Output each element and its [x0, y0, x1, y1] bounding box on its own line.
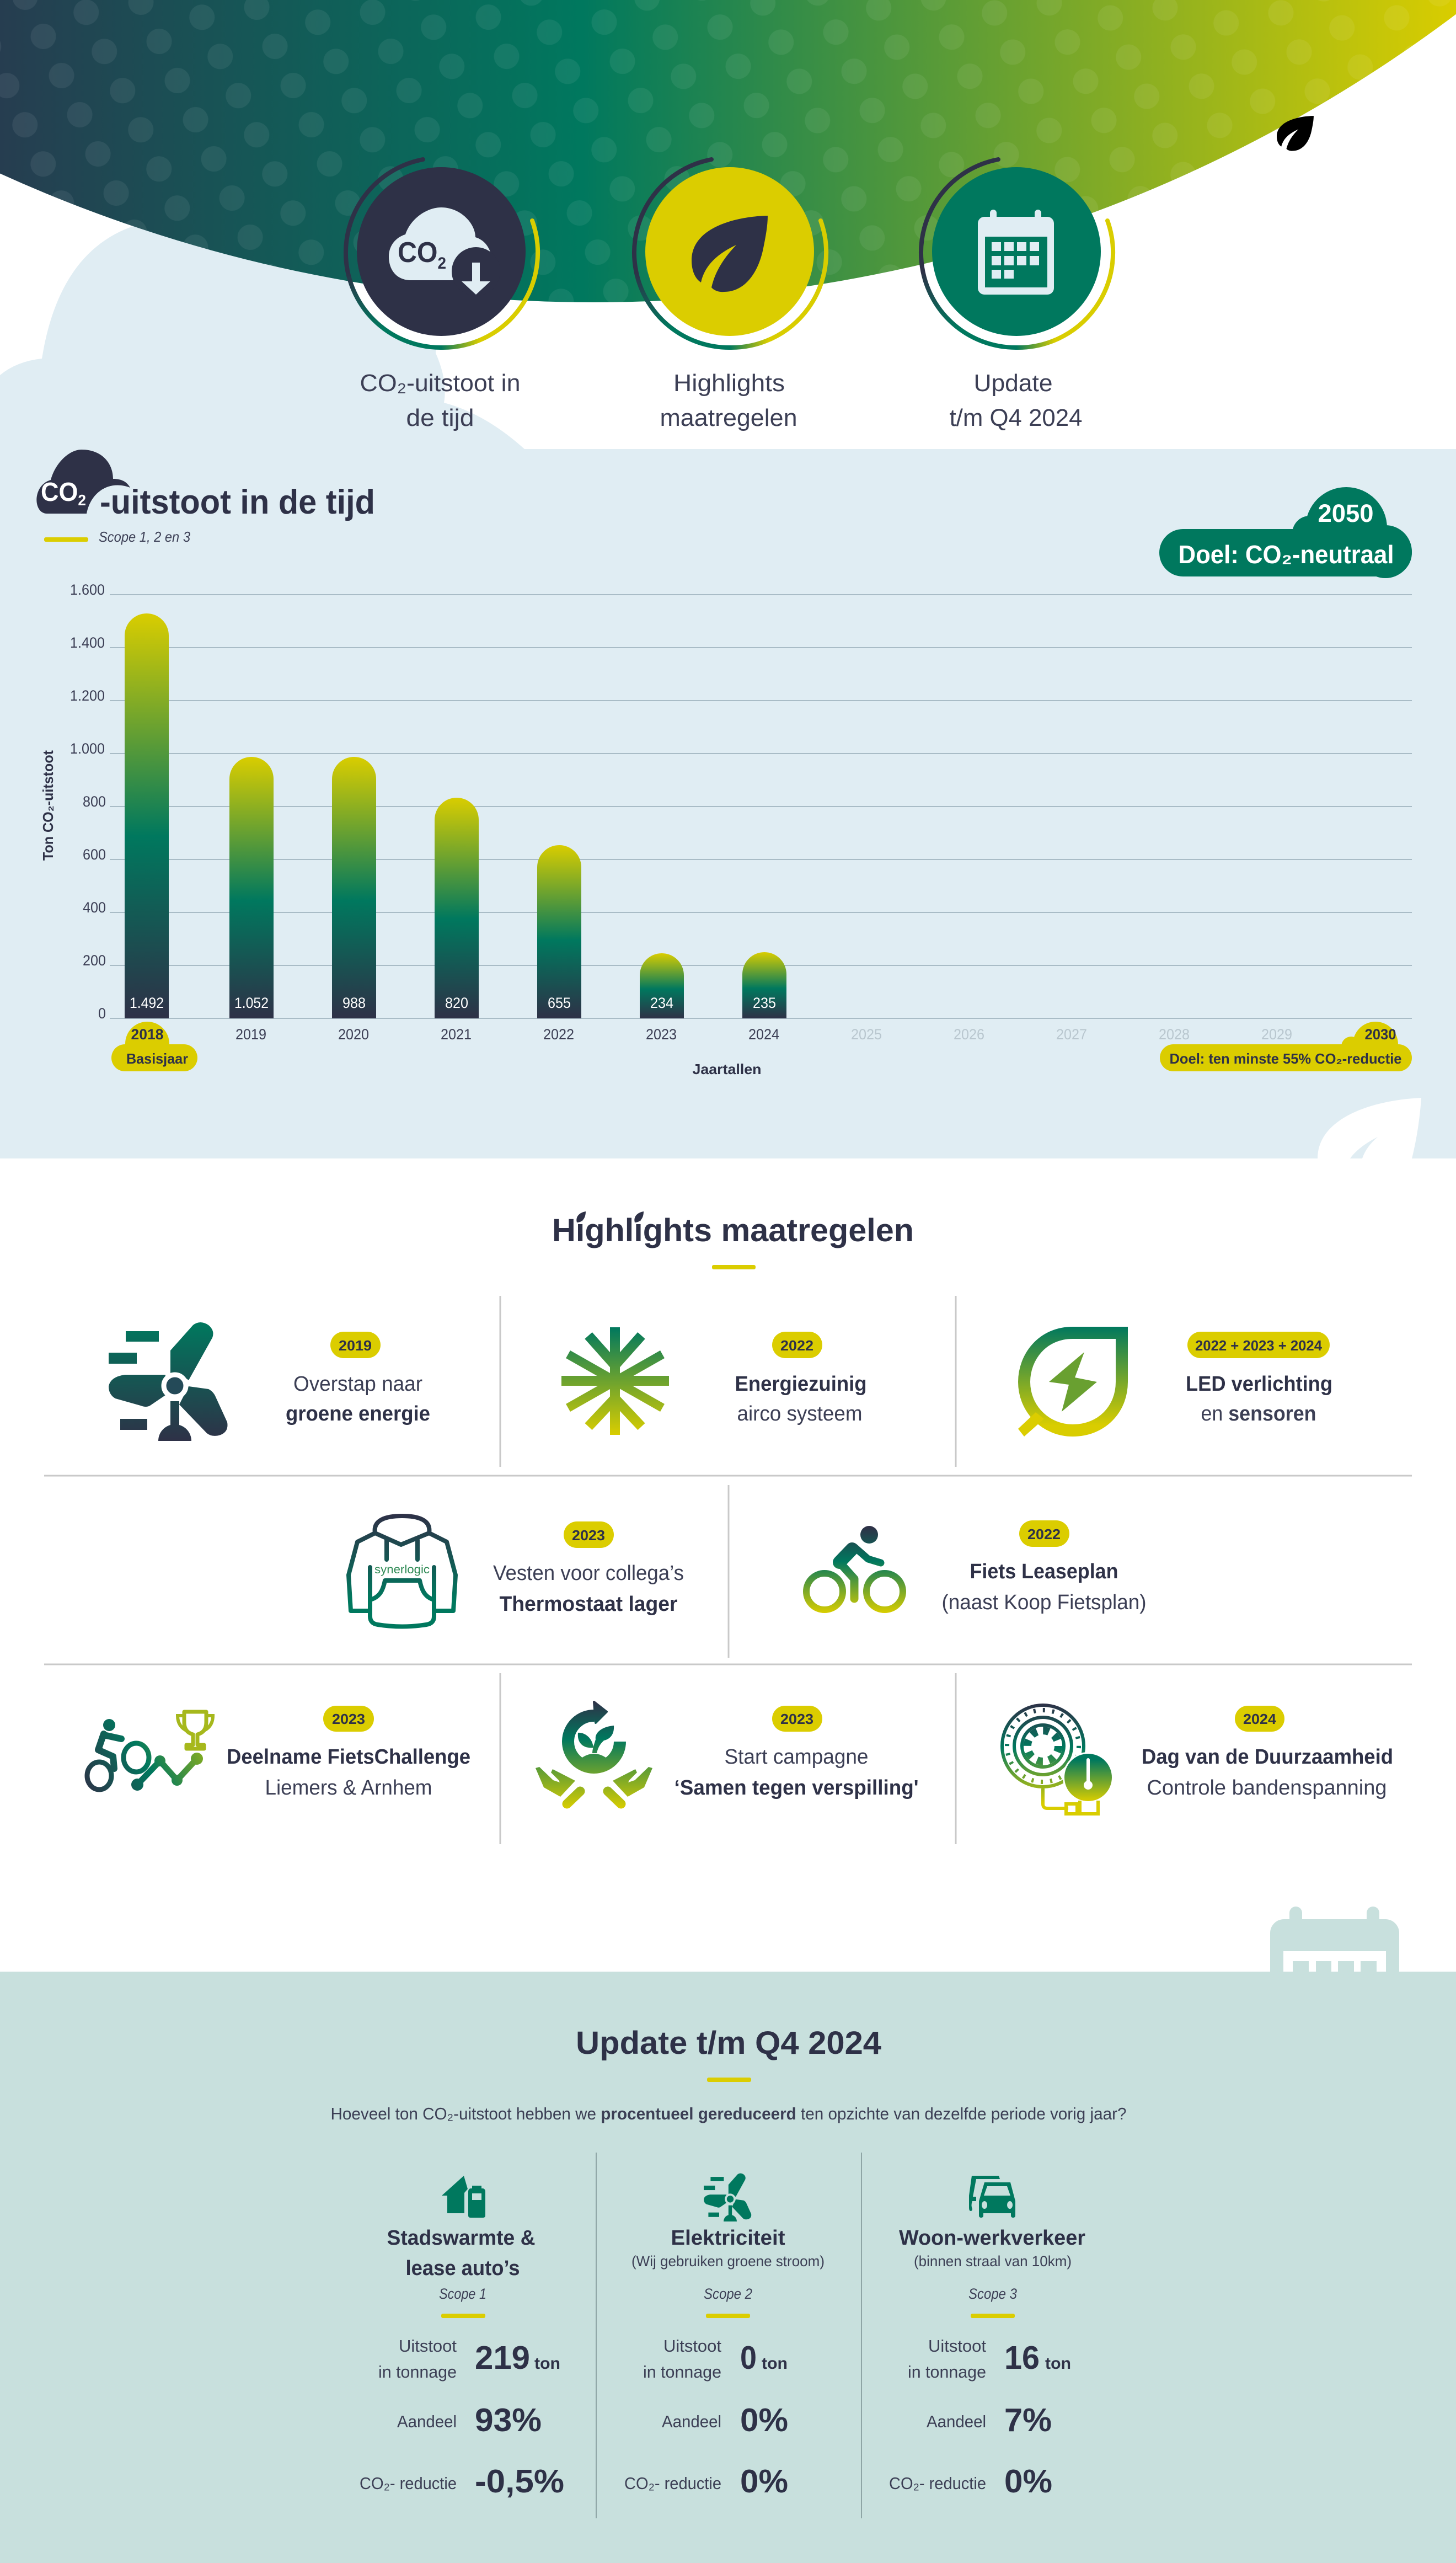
item: energiezuinig: [561, 1327, 867, 1435]
y axis labels: 400: [83, 899, 106, 916]
panel: update background: [0, 1972, 1456, 2563]
heading: Update t/m Q4 2024: Update t/m Q4 2024: [576, 2025, 881, 2061]
navigation labels: Highlights: [673, 370, 785, 397]
column: scope 3: ton: [1045, 2354, 1071, 2373]
icon: CO2 cloud in title: CO: [41, 478, 81, 507]
icon: CO2 cloud in title: 2: [78, 492, 86, 509]
column: scope 3: [889, 2176, 1085, 2500]
y axis labels: 1.200: [70, 687, 105, 704]
icon: cars: [969, 2176, 1015, 2218]
icon: leaf circle: [634, 159, 826, 348]
icon: wind turbine: [109, 1322, 227, 1441]
item: dag van de duurzaamheid: 2024: [1243, 1711, 1277, 1727]
column: scope 2: Uitstoot: [663, 2336, 721, 2356]
item: fietschallenge: Deelname FietsChallenge: [227, 1745, 470, 1769]
goal badge 2030: Doel: ten minste 55% CO₂-reductie: [1169, 1050, 1402, 1067]
heading: Highlights maatregelen: Highlights maatregelen: [552, 1213, 914, 1248]
y axis labels: 200: [83, 952, 106, 969]
column: scope 2: 0: [740, 2340, 757, 2376]
item: samen tegen verspilling: ‘Samen tegen verspilling': [674, 1776, 919, 1800]
bar values: 1.492: [130, 995, 164, 1011]
x axis labels: 2029: [1261, 1026, 1292, 1043]
column: scope 2: Elektriciteit: [671, 2226, 785, 2250]
column: scope 1: in tonnage: [378, 2362, 457, 2382]
item: dag van de duurzaamheid: Controle bandenspanning: [1147, 1776, 1387, 1800]
y axis labels: 1.000: [70, 740, 105, 757]
icon: snowflake: [561, 1327, 669, 1435]
column: scope 1: Aandeel: [397, 2412, 457, 2431]
icon: sprout in hands: [536, 1702, 652, 1804]
icon: black leaf: [1277, 116, 1314, 151]
item: thermostaat lager: 2023: [572, 1527, 605, 1544]
icon: white leaf decoration: [1318, 1098, 1421, 1158]
x axis labels: 2028: [1159, 1026, 1190, 1043]
y axis labels: 1.600: [70, 581, 105, 598]
white disc behind first icon: [346, 157, 536, 346]
scope legend: Scope 1, 2 en 3: [99, 528, 190, 545]
item: energiezuinig: Energiezuinig: [735, 1373, 867, 1396]
item: groene energie: Overstap naar: [293, 1373, 422, 1396]
column: scope 1: CO₂- reductie: [360, 2474, 457, 2493]
x axis labels: 2019: [235, 1026, 266, 1043]
column: scope 2: 0%: [740, 2463, 788, 2500]
item: thermostaat lager: synerlogic: [374, 1563, 430, 1576]
item: fietschallenge: Liemers & Arnhem: [265, 1776, 432, 1800]
column: scope 2: Scope 2: [704, 2286, 752, 2302]
icon: calendar circle: [921, 159, 1113, 348]
column: scope 3: Aandeel: [927, 2412, 986, 2431]
column: scope 3: Scope 3: [968, 2286, 1017, 2302]
column: scope 1: -0,5%: [475, 2463, 564, 2500]
item: fietschallenge: [87, 1706, 470, 1800]
bar values: 655: [548, 995, 571, 1011]
y axis labels: [70, 581, 106, 1022]
navigation labels: Update: [974, 370, 1052, 397]
column: scope 3: 0%: [1004, 2463, 1052, 2500]
y axis labels: 600: [83, 846, 106, 863]
goal badge 2030: [1160, 1022, 1412, 1071]
column: scope 3: (binnen straal van 10km): [914, 2253, 1072, 2270]
bar values: 234: [650, 995, 673, 1011]
x axis labels: 2026: [954, 1026, 984, 1043]
item: LED verlichting: 2022 + 2023 + 2024: [1195, 1337, 1323, 1354]
scope legend: [44, 528, 190, 545]
icon: CO2 circle: [346, 159, 538, 348]
item: energiezuinig: airco systeem: [737, 1402, 863, 1425]
navigation labels: CO₂-uitstoot in: [360, 370, 521, 397]
badge: [772, 1706, 822, 1732]
header gradient blob: [0, 0, 1456, 302]
icon: LED leaf: [1018, 1333, 1122, 1437]
badge: [1235, 1706, 1284, 1732]
item: fietschallenge: 2023: [332, 1711, 365, 1727]
icon: hoodie: [349, 1516, 456, 1626]
heading: Update t/m Q4 2024: [576, 2025, 881, 2082]
icon: CO2 circle: CO: [398, 237, 441, 269]
navigation labels: maatregelen: [660, 404, 797, 431]
basisjaar badge: Basisjaar: [126, 1050, 188, 1067]
bar values: 988: [342, 995, 366, 1011]
badge: [772, 1332, 822, 1358]
column: scope 1: 219: [475, 2340, 530, 2376]
icon: house and gas bottle: [442, 2176, 485, 2218]
basisjaar badge: [111, 1022, 197, 1071]
item: thermostaat lager: [349, 1516, 684, 1626]
heading: CO2-uitstoot in de tijd: -uitstoot in de tijd: [100, 483, 375, 521]
basisjaar badge: 2018: [131, 1026, 163, 1043]
item: groene energie: groene energie: [286, 1402, 430, 1425]
item: samen tegen verspilling: Start campagne: [725, 1745, 868, 1769]
x axis labels: 2022: [543, 1026, 574, 1043]
goal badge 2030: 2030: [1364, 1026, 1396, 1043]
bar values: 1.052: [234, 995, 269, 1011]
item: fiets leaseplan: Fiets Leaseplan: [970, 1560, 1118, 1583]
item: dag van de duurzaamheid: Dag van de Duurzaamheid: [1142, 1745, 1393, 1769]
icon: tyre pressure gauge: [1002, 1705, 1114, 1814]
bar chart: [40, 581, 1412, 1077]
y axis labels: 800: [83, 793, 106, 810]
goal badge 2050: Doel: CO₂-neutraal: [1178, 540, 1394, 569]
item: dag van de duurzaamheid: [1002, 1705, 1393, 1814]
badge: [1019, 1520, 1069, 1547]
item: groene energie: [109, 1322, 430, 1441]
column: scope 3: in tonnage: [908, 2362, 986, 2382]
column: scope 2: in tonnage: [643, 2362, 721, 2382]
navigation labels: t/m Q4 2024: [950, 404, 1082, 431]
x axis title: Jaartallen: [693, 1061, 761, 1077]
item: thermostaat lager: Vesten voor collega’s: [493, 1562, 684, 1585]
icon: CO2 cloud in title: [36, 450, 130, 514]
heading: Highlights maatregelen: [552, 1211, 914, 1269]
icon: calendar decoration: [1270, 1907, 1399, 1972]
navigation labels: [360, 370, 1082, 431]
x axis labels: 2024: [748, 1026, 779, 1043]
column: scope 3: Uitstoot: [928, 2336, 986, 2356]
y axis labels: 1.400: [70, 634, 105, 651]
icon: wind turbine small: [704, 2174, 751, 2222]
column: scope 3: 16: [1004, 2340, 1040, 2376]
y axis title: Ton CO₂-uitstoot: [40, 750, 56, 861]
column: scope 1: [360, 2176, 564, 2500]
x axis labels: [235, 1026, 1292, 1043]
x axis labels: 2025: [851, 1026, 882, 1043]
panel: CO2 chart background with cloud: [0, 221, 1456, 1158]
column: scope 1: 93%: [475, 2402, 542, 2438]
item: LED verlichting: LED verlichting: [1186, 1373, 1332, 1396]
column: scope 1: ton: [534, 2354, 560, 2373]
goal badge 2050: 2050: [1318, 499, 1373, 527]
item: fiets leaseplan: 2022: [1027, 1526, 1061, 1542]
column: scope 3: 7%: [1004, 2402, 1052, 2438]
column: scope 1: Stadswarmte &: [387, 2226, 535, 2250]
column: scope 2: ton: [762, 2354, 788, 2373]
item: fiets leaseplan: [806, 1520, 1146, 1614]
y axis labels: 0: [98, 1005, 106, 1022]
bar values: 235: [753, 995, 776, 1011]
bar values: [130, 995, 776, 1011]
icon: cycling challenge: [87, 1712, 213, 1791]
badge: [330, 1332, 381, 1358]
intro sentence: Hoeveel ton CO₂-uitstoot hebben we procentueel gereduceerd ten opzichte van dezelfde periode vorig jaar?: [331, 2104, 1126, 2123]
column: scope 3: Woon-werkverkeer: [899, 2226, 1085, 2250]
column: scope 1: Scope 1: [439, 2286, 486, 2302]
column: scope 2: (Wij gebruiken groene stroom): [631, 2253, 825, 2270]
x axis labels: 2023: [646, 1026, 677, 1043]
column: scope 2: 0%: [740, 2402, 788, 2438]
column: scope 3: CO₂- reductie: [889, 2474, 986, 2493]
item: LED verlichting: [1018, 1332, 1332, 1437]
column: scope 2: CO₂- reductie: [624, 2474, 721, 2493]
badge: [564, 1521, 614, 1548]
item: LED verlichting: en sensoren: [1201, 1402, 1316, 1425]
item: thermostaat lager: Thermostaat lager: [500, 1593, 678, 1616]
badge: [1187, 1332, 1330, 1358]
item: fiets leaseplan: (naast Koop Fietsplan): [942, 1591, 1146, 1614]
item: groene energie: 2019: [339, 1337, 372, 1354]
navigation labels: de tijd: [406, 404, 474, 431]
goal badge 2050: [1159, 487, 1412, 578]
column: scope 2: Aandeel: [662, 2412, 721, 2431]
column: scope 2: [624, 2174, 825, 2500]
x axis labels: 2027: [1056, 1026, 1087, 1043]
item: energiezuinig: 2022: [780, 1337, 813, 1354]
bar values: 820: [445, 995, 468, 1011]
x axis labels: 2020: [338, 1026, 369, 1043]
icon: cyclist: [806, 1526, 903, 1610]
column: scope 1: lease auto’s: [406, 2257, 520, 2280]
column: scope 1: Uitstoot: [399, 2336, 457, 2356]
x axis labels: 2021: [441, 1026, 472, 1043]
icon: CO2 circle: 2: [437, 254, 446, 273]
item: samen tegen verspilling: [536, 1702, 919, 1804]
item: samen tegen verspilling: 2023: [780, 1711, 813, 1727]
bars: [125, 613, 786, 1018]
badge: [323, 1706, 374, 1732]
